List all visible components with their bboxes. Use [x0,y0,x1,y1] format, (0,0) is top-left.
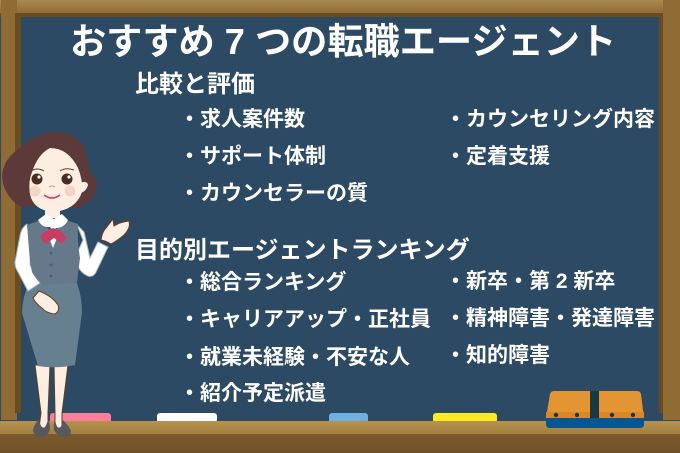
legs [35,365,68,428]
shirt front [49,238,57,248]
chalk: pink [50,413,111,423]
nose [49,186,55,187]
list: ranking items left: ・総合ランキング [179,270,346,294]
list: ranking items right [445,270,655,367]
ear [80,182,88,193]
list: comparison items left: ・求人案件数 [179,108,305,131]
collar [38,214,68,232]
cheeks [30,186,76,196]
icon: blackboard eraser [546,391,644,428]
list: ranking items left: ・就業未経験・不安な人 [179,346,410,369]
list: comparison items right: ・定着支援 [445,145,550,168]
right hand [101,219,129,244]
list: ranking items left: ・キャリアアップ・正社員 [179,308,431,331]
vest [27,220,80,285]
list: comparison items left [179,108,368,205]
skirt [22,283,82,367]
right sleeve [75,225,108,276]
chalk: blue [329,413,368,423]
list: ranking items right: ・知的障害 [445,344,550,367]
illustration: woman in office uniform [2,132,129,437]
face [29,148,82,212]
eyes and brows [31,169,74,184]
left hand [33,291,59,314]
list: ranking items left: ・紹介予定派遣 [179,382,326,405]
list: comparison items right [445,107,655,168]
vest buttons [50,252,52,278]
left sleeve [15,224,40,291]
list: comparison items left: ・サポート体制 [179,145,326,168]
bow tie [40,228,67,244]
heading: comparison and evaluation: 比較と評価 [135,71,255,98]
list: ranking items right: ・精神障害・発達障害 [445,307,655,330]
neck [45,210,60,218]
list: ranking items right: ・新卒・第 2 新卒 [445,270,615,293]
heading: ranking by purpose: 目的別エージェントランキング [135,236,470,264]
hair [2,132,97,208]
shoes [33,419,71,437]
chalk: white [157,413,217,423]
list: comparison items right: ・カウンセリング内容 [445,107,655,131]
list: comparison items left: ・カウンセラーの質 [179,182,368,205]
chalk tray ledge [0,421,680,453]
mouth [44,195,60,198]
title: おすすめ 7 つの転職エージェント [70,21,616,62]
chalk: yellow [433,413,497,423]
list: ranking items left [179,270,431,405]
